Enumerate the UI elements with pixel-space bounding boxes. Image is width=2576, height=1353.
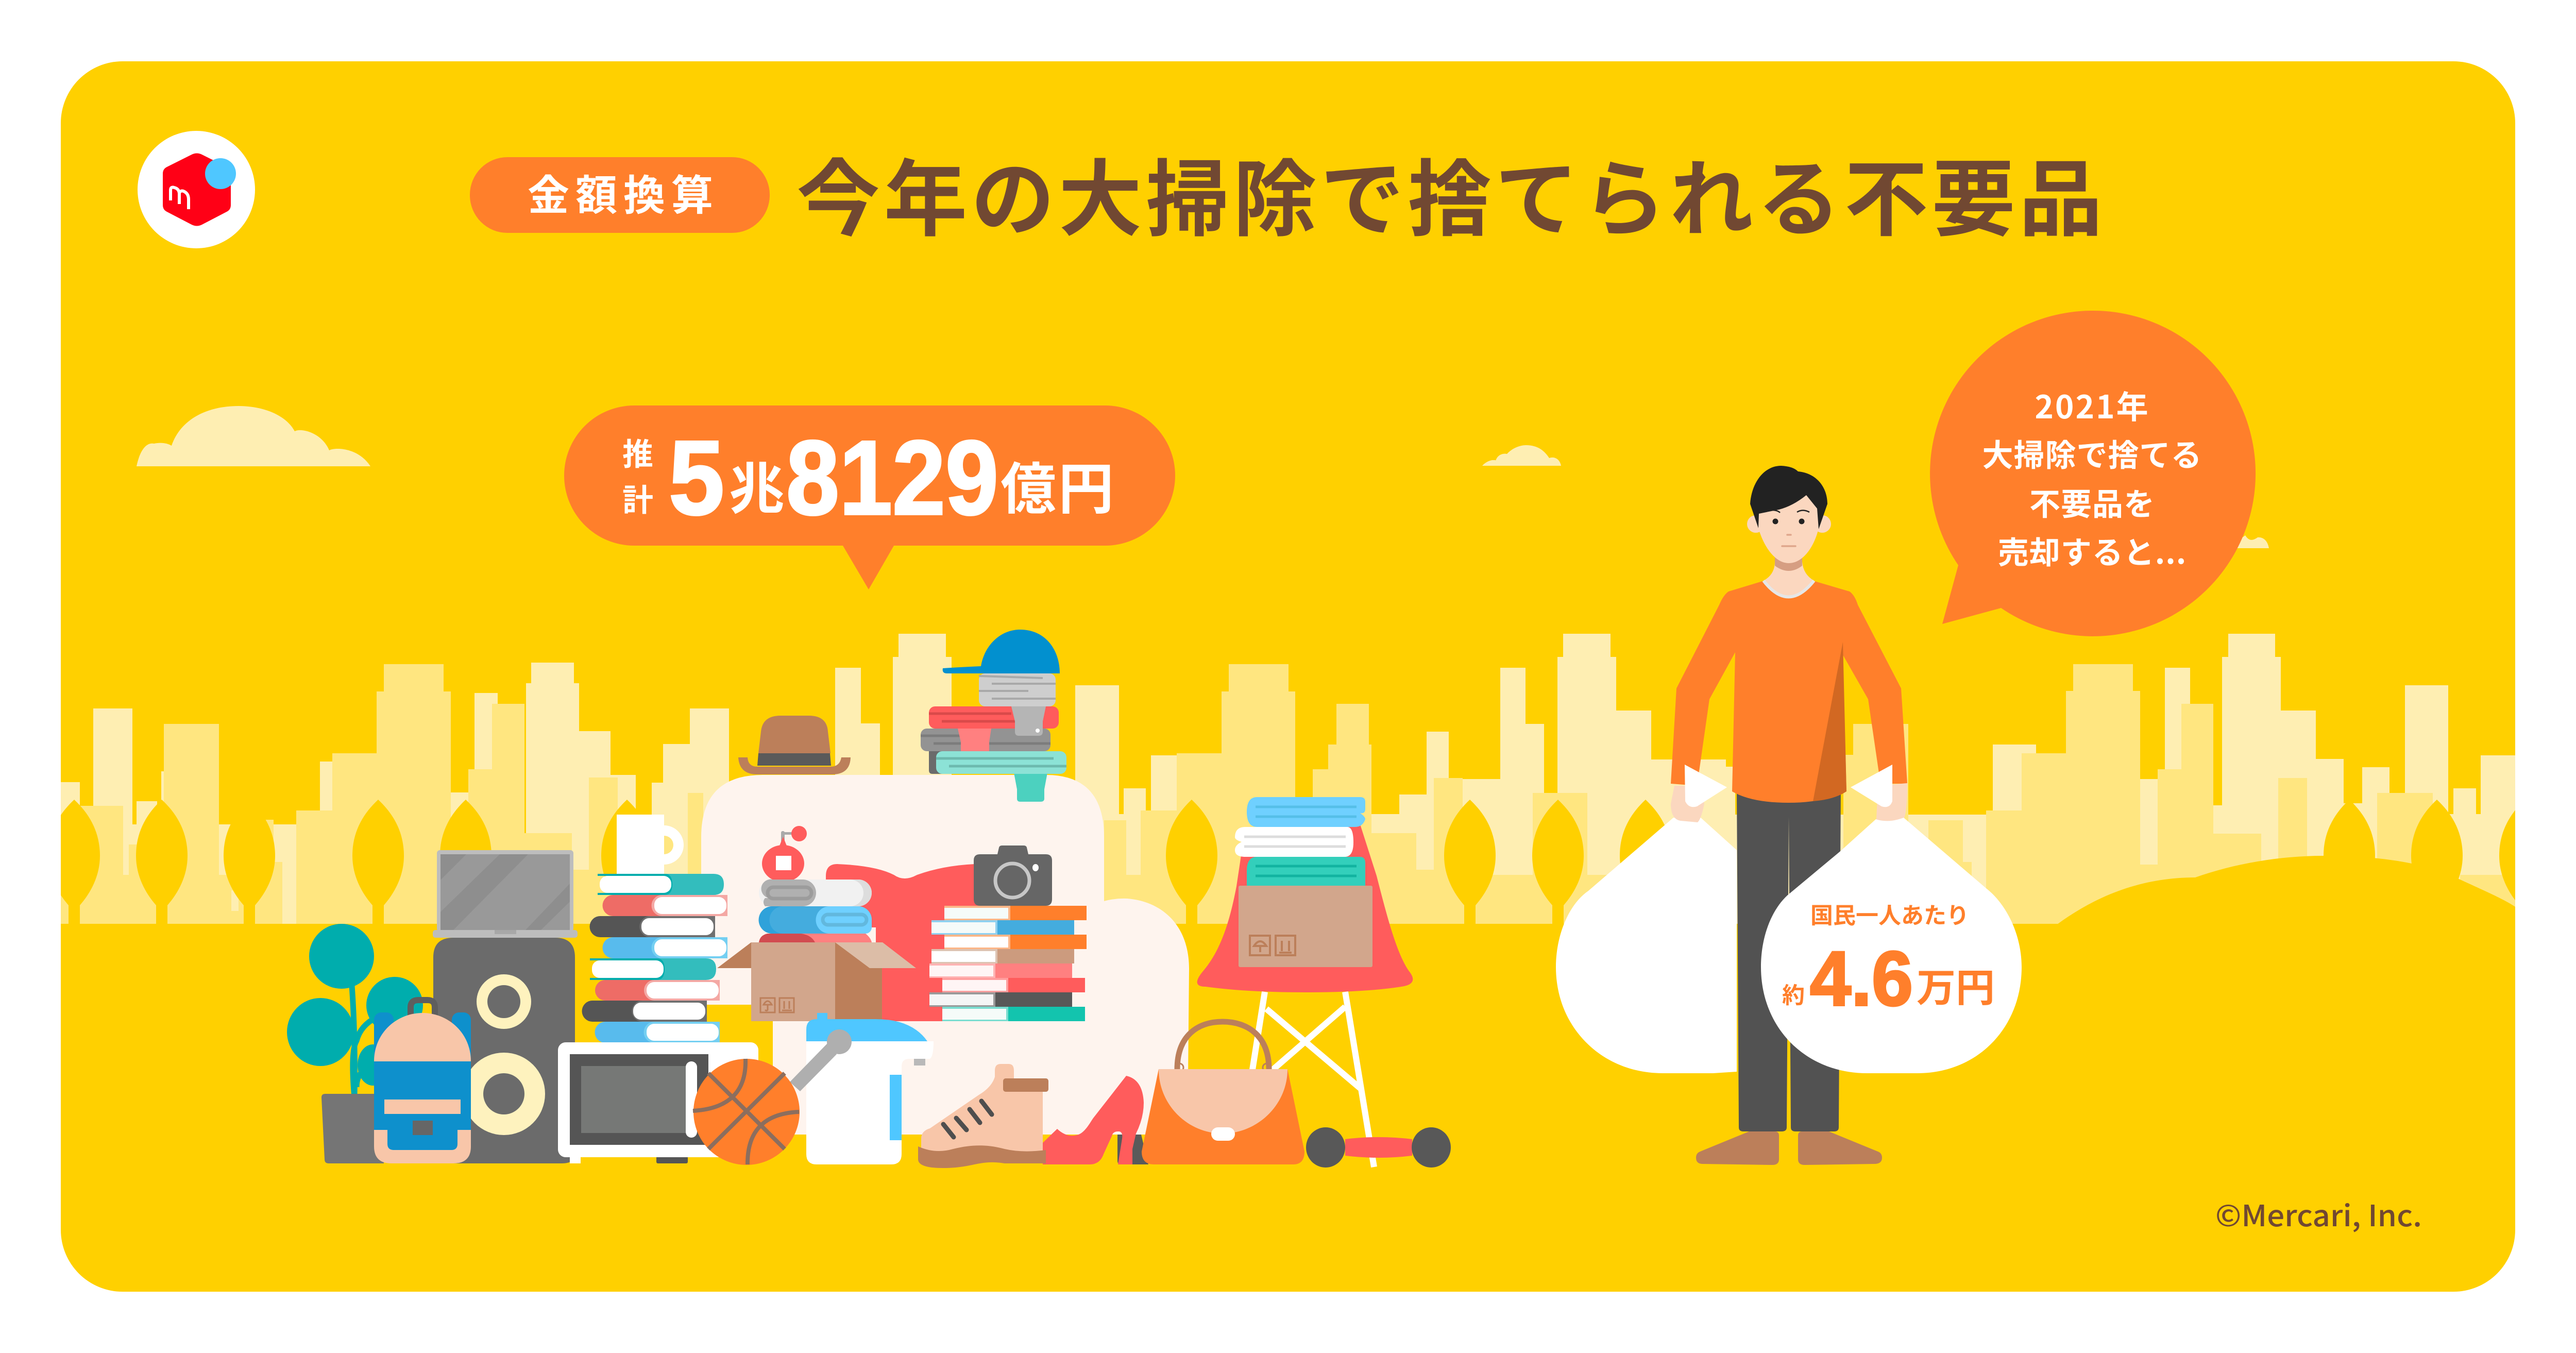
- brow: [1771, 510, 1809, 513]
- icon: basketball: [693, 1059, 800, 1165]
- callout: estimated total: [564, 405, 1175, 589]
- pants: [1737, 788, 1841, 1131]
- icon: folded towels: [758, 880, 872, 942]
- right garbage bag: [1761, 818, 2022, 1073]
- hair: [1750, 466, 1827, 529]
- title: 今年の大掃除で捨てられる不要品: [796, 132, 2106, 253]
- icon: stool with boxes: [1197, 797, 1413, 1167]
- icon: kettle: [790, 1013, 934, 1164]
- callout: speech bubble 2021: 大掃除で捨てる: [1982, 431, 2202, 476]
- copyright: ©Mercari, Inc.: [2215, 1193, 2422, 1235]
- icon: book stack left: [582, 874, 727, 1043]
- icon: perfume: [762, 826, 807, 882]
- nose and mouth: [1782, 535, 1795, 546]
- icon: clothes pile with cap: [921, 630, 1066, 802]
- icon: dumbbell: [1306, 1127, 1451, 1168]
- cloud: large left: [137, 406, 370, 466]
- bag text: [1782, 897, 1995, 1022]
- callout: speech bubble 2021: 不要品を: [2029, 480, 2155, 525]
- panel: cream item backdrop: [701, 775, 1189, 1135]
- neck shadow: [1775, 554, 1802, 571]
- bag text: 約: [1782, 977, 1805, 1010]
- icon: boot: [918, 1064, 1048, 1168]
- icon: cardboard box: [717, 942, 916, 1021]
- tag: 金額換算: 金額換算: [528, 162, 719, 223]
- city skyline background: [48, 634, 2551, 924]
- callout: speech bubble 2021: 2021年: [2035, 381, 2150, 428]
- bag text: 4.6: [1810, 935, 1913, 1022]
- right hand: [1876, 783, 1907, 822]
- callout: estimated total: 兆: [729, 445, 785, 525]
- shirt shadow: [1813, 642, 1846, 801]
- icon: speaker: [433, 938, 575, 1163]
- ears and neck: [1747, 515, 1831, 597]
- icon: laptop: [433, 850, 578, 938]
- icon: backpack: [374, 1000, 471, 1163]
- right bag knot: [1851, 765, 1892, 807]
- icon: red garment: [826, 864, 1010, 1021]
- callout: estimated total: 億円: [1001, 445, 1114, 525]
- icon: book stack right: [929, 906, 1087, 1021]
- cloud: right behind bubble: [2231, 535, 2269, 548]
- illustration: person with bags: [1556, 466, 2022, 1165]
- shirt collar: [1764, 581, 1814, 597]
- right shoe: [1798, 1131, 1882, 1165]
- bag text: 万円: [1917, 956, 1995, 1013]
- logo: mercari: [138, 131, 255, 248]
- callout: speech bubble 2021: [1930, 311, 2256, 636]
- callout: speech bubble 2021: 売却すると...: [1998, 528, 2187, 573]
- icon: plant: [287, 924, 423, 1163]
- callout: estimated total: 8129: [786, 419, 998, 537]
- left shoe: [1696, 1131, 1779, 1165]
- icon: brown hat: [738, 716, 851, 774]
- icon: high heel: [1043, 1076, 1144, 1164]
- callout: estimated total: 計: [622, 476, 653, 520]
- face: [1758, 495, 1819, 563]
- left hand: [1671, 786, 1704, 822]
- callout: estimated total: 5: [669, 419, 724, 537]
- callout: estimated total: 推: [622, 430, 653, 475]
- bag text: 国民一人あたり: [1810, 897, 1969, 930]
- icon: handbag: [1142, 1022, 1304, 1164]
- icon: mug: [617, 815, 684, 874]
- tag: 金額換算: [470, 157, 770, 233]
- eyes: [1772, 518, 1804, 525]
- shirt: [1671, 581, 1907, 803]
- icon: dark block behind shoes: [1117, 1135, 1148, 1164]
- icon: microwave: [558, 1042, 758, 1163]
- left garbage bag: [1556, 818, 1737, 1073]
- icon: camera: [974, 845, 1052, 906]
- left bag knot: [1685, 765, 1727, 807]
- cloud: small center: [1482, 445, 1561, 466]
